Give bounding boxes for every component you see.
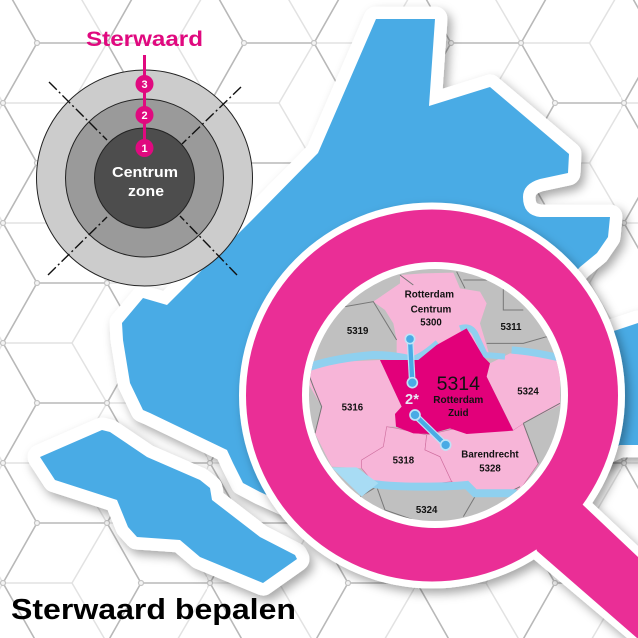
marker 3: 3 (141, 79, 148, 91)
map labels: 5328 (479, 464, 501, 475)
map labels: Centrum (411, 305, 451, 316)
lens rim (302, 262, 568, 528)
map labels: 5314 (437, 374, 480, 395)
map labels: 5318 (393, 455, 415, 466)
map labels: 5316 (342, 403, 364, 414)
grey boundaries (308, 272, 560, 523)
rivers (308, 327, 562, 497)
map labels: 5319 (347, 326, 369, 337)
outer ring 3 (36, 70, 252, 286)
map labels: Barendrecht (461, 449, 519, 460)
centre zone label: zone (128, 183, 164, 200)
region: 5324 right (487, 353, 560, 430)
marker 2: 2 (141, 110, 148, 122)
map: main blue region (122, 19, 638, 510)
lens map (309, 269, 561, 521)
map labels: 5311 (501, 322, 522, 333)
map labels (342, 290, 539, 516)
dashed sector lines (48, 82, 241, 275)
marker 1: 1 (141, 143, 148, 155)
Sterwaard label: Sterwaard (86, 27, 203, 51)
map labels: Rotterdam (433, 395, 483, 406)
region: Rotterdam Zuid 5314 (380, 328, 513, 434)
magnifying glass (239, 202, 638, 638)
map labels: 5300 (420, 318, 442, 329)
region: 5316 (303, 360, 402, 468)
concentric zone diagram (36, 27, 252, 286)
map labels: Zuid (448, 408, 469, 419)
region: Rotterdam Centrum (373, 273, 490, 360)
centre zone (94, 128, 194, 228)
map labels: Rotterdam (405, 290, 454, 301)
pink star line (143, 55, 146, 148)
centre zone label: Centrum (112, 164, 178, 181)
marker 2 (136, 106, 154, 124)
region: 5328 (425, 423, 538, 490)
region: 5318 (362, 427, 452, 487)
map labels: 5324 (517, 386, 539, 397)
marker 1 (136, 139, 154, 157)
marker 3 (136, 75, 154, 93)
title: Sterwaard bepalen (11, 594, 296, 626)
map: lower blue island (40, 430, 297, 583)
magnifier body (239, 202, 638, 638)
blue connector markers (405, 334, 451, 450)
middle ring 2 (66, 99, 224, 257)
map labels: 2* (405, 392, 419, 408)
map labels: 5324 (416, 505, 438, 516)
centre zone label (112, 164, 178, 200)
